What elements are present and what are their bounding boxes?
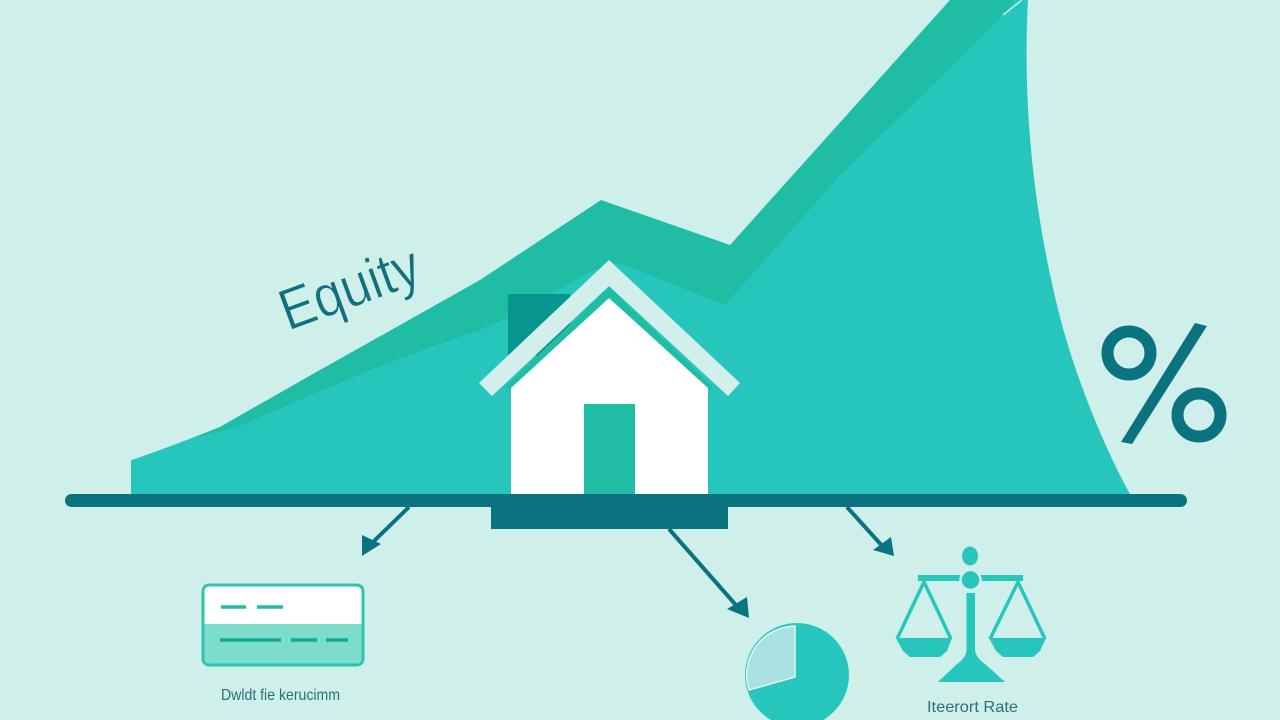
baseline bar	[65, 494, 1187, 507]
label: scales caption: Iteerort Rate	[927, 699, 1018, 716]
scale beam	[918, 575, 1023, 581]
card lower panel	[204, 624, 362, 664]
icon: house	[479, 260, 740, 495]
card lower dashes	[220, 638, 348, 642]
scale column	[938, 593, 1005, 682]
icon: payment card	[203, 585, 363, 665]
heading: Equity: Equity	[270, 232, 429, 343]
chart upper band	[190, 0, 1015, 439]
pie small slice	[747, 626, 795, 690]
scale top knob	[962, 546, 978, 566]
card upper dashes	[221, 605, 283, 609]
scale right pan	[989, 638, 1046, 657]
area chart: rising equity curve	[131, 0, 1130, 494]
arrow: to pie chart	[669, 529, 749, 618]
icon: percent sign	[1108, 323, 1220, 444]
scale right strings	[990, 582, 1045, 639]
chart highlight	[1003, 0, 1022, 15]
card body	[203, 585, 363, 665]
scale left strings	[897, 582, 951, 639]
roof inner band	[506, 287, 712, 392]
scale centre hub	[960, 570, 980, 590]
baseline platform	[65, 494, 1187, 529]
house body	[511, 298, 708, 495]
arrow: to card	[362, 507, 409, 556]
icon: balance scales	[896, 546, 1046, 682]
scale left pan	[896, 638, 952, 657]
chart area fill	[131, 0, 1130, 494]
centre base	[491, 507, 728, 529]
door	[584, 404, 635, 495]
roof	[479, 260, 740, 396]
chimney	[508, 294, 570, 356]
pie large slice	[745, 623, 849, 720]
label: card caption: Dwldt fie kerucimm	[221, 687, 340, 704]
arrow: to scales	[847, 507, 894, 556]
icon: pie chart	[745, 623, 849, 720]
